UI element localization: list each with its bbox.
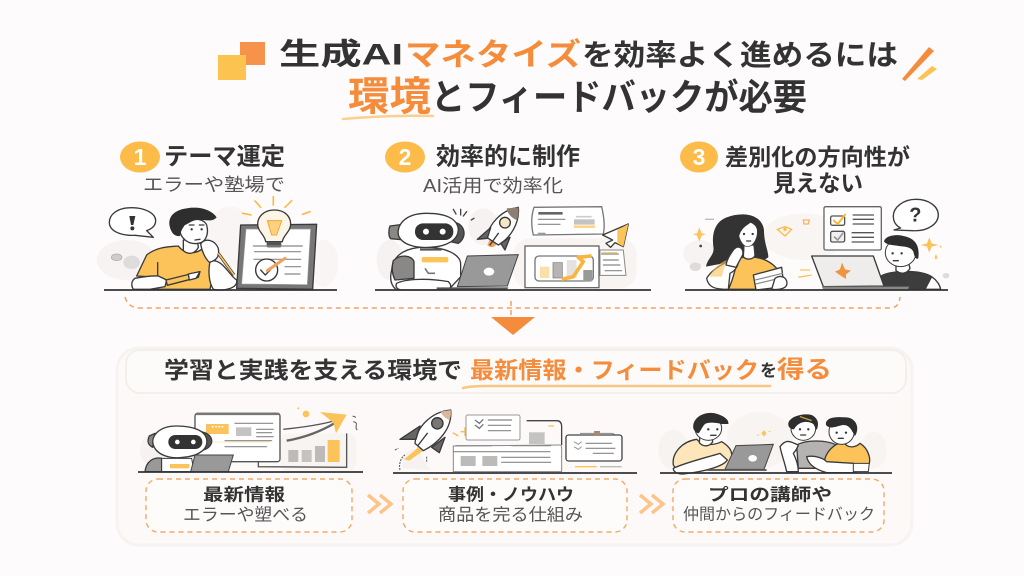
title block bbox=[218, 38, 937, 119]
panel: step 2 bbox=[375, 142, 651, 291]
card text: 仲間からのフィードバック bbox=[683, 506, 875, 524]
panel: step 3 bbox=[680, 142, 949, 291]
card title: 最新情報 bbox=[203, 486, 285, 504]
column: latest info bbox=[138, 407, 363, 532]
panel heading tail: 得る bbox=[777, 356, 832, 384]
step 1 ground line bbox=[104, 289, 337, 291]
panel heading particle: を bbox=[760, 362, 777, 380]
panel heading highlight: 最新情報・フィードバック bbox=[470, 357, 759, 383]
dashed connector bracket bbox=[125, 297, 900, 317]
step 3 badge bbox=[680, 142, 718, 172]
step 1 badge bbox=[120, 142, 160, 172]
title line 1: 生成AI bbox=[279, 38, 403, 72]
title line 1 remainder: を効率よく進めるには bbox=[582, 39, 898, 72]
card title: プロの講師や bbox=[708, 486, 832, 504]
arrow: chevrons 2 bbox=[640, 495, 663, 513]
illustration: person with idea board bbox=[97, 197, 338, 290]
title line 2: とフィードバックが必要 bbox=[431, 76, 807, 118]
illustration: rocket and documents bbox=[395, 410, 622, 472]
title highlight: monetize: マネタイズ bbox=[405, 38, 581, 72]
panel: learning environment bbox=[117, 348, 912, 545]
step 2 badge bbox=[385, 142, 425, 172]
heading underline bbox=[463, 386, 770, 388]
title highlight: environment: 環境 bbox=[348, 75, 431, 119]
dashed card: feedback bbox=[673, 479, 884, 532]
arrow: down triangle bbox=[491, 317, 535, 335]
dashed card: latest info bbox=[146, 479, 352, 532]
dashed card: case studies bbox=[403, 479, 627, 532]
illustration: robot, rocket and chart bbox=[377, 207, 637, 291]
panel heading: 学習と実践を支える環境で bbox=[164, 357, 462, 383]
illustration: two people and a checklist bbox=[683, 199, 949, 291]
icon: overlapping squares bbox=[218, 42, 265, 80]
step 2 subtitle: AI活用で効率化 bbox=[423, 176, 563, 196]
step 2 badge: 2 bbox=[399, 144, 411, 170]
arrow: chevrons 1 bbox=[368, 495, 391, 513]
illustration: robot with dashboard bbox=[140, 407, 357, 472]
step 3 badge: 3 bbox=[693, 144, 705, 170]
panel header bar bbox=[126, 350, 906, 393]
step 3 heading line 2: 見えない bbox=[773, 170, 863, 196]
ground line bbox=[393, 472, 637, 474]
card text: エラーや塑べる bbox=[183, 506, 308, 524]
step 3 heading: 差別化の方向性が bbox=[725, 144, 910, 170]
step 3 ground line bbox=[685, 289, 948, 291]
icon: pencil accent strokes bbox=[902, 47, 937, 81]
step 1 badge: 1 bbox=[134, 144, 147, 170]
ground line bbox=[138, 471, 363, 473]
step 2 heading: 効率的に制作 bbox=[436, 144, 580, 170]
column: feedback bbox=[658, 412, 892, 532]
title underline bbox=[343, 116, 433, 119]
step 2 ground line bbox=[375, 289, 651, 291]
illustration: team discussing at laptop bbox=[658, 412, 887, 474]
step 1 subtitle: エラーや塾場で bbox=[143, 175, 285, 195]
card title: 事例・ノウハウ bbox=[448, 486, 574, 504]
card text: 商品を完る仕組み bbox=[438, 506, 583, 524]
illustration: two people and a checklist: ? bbox=[909, 204, 921, 226]
step 1 heading: テーマ運定 bbox=[164, 144, 285, 170]
panel: step 1 bbox=[97, 142, 338, 290]
column: case studies bbox=[393, 410, 637, 532]
ground line bbox=[660, 472, 892, 474]
panel background bbox=[117, 348, 912, 545]
